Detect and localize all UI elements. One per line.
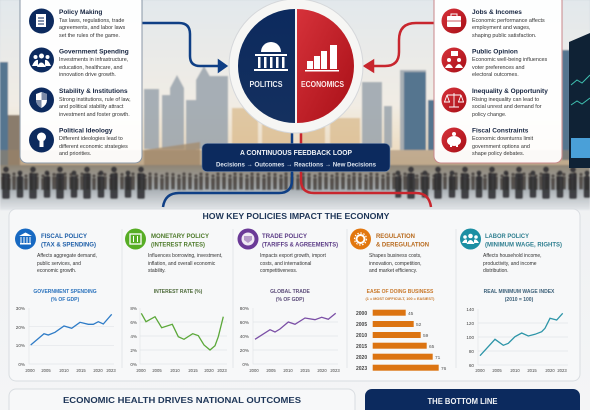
chart: interest rate: 2010 <box>170 368 180 373</box>
chart: ease of doing business: 71 <box>435 355 441 361</box>
item: government spending: innovation drive growth. <box>59 72 116 78</box>
item: fiscal constraints: Fiscal Constraints <box>472 128 529 134</box>
chart: government spending <box>16 289 116 373</box>
chart: real minimum wage index: 2010 <box>510 368 520 373</box>
item: government spending: Government Spending <box>59 48 129 56</box>
item: fiscal constraints: shape policy debates. <box>472 151 524 157</box>
item: policy making: Policy Making <box>59 9 102 16</box>
chart: real minimum wage index: 2023 <box>557 368 567 373</box>
item: jobs and incomes: Jobs & Incomes <box>472 9 522 16</box>
item: jobs and incomes <box>442 8 545 39</box>
item: stability and institutions: and political stability attract <box>59 104 124 110</box>
column: regulation and deregulation <box>350 228 447 372</box>
chart: ease of doing business: 76 <box>441 366 447 372</box>
item: stability and institutions: Stability & Institutions <box>59 88 128 95</box>
column: monetary policy: MONETARY POLICY <box>151 233 209 240</box>
chart: real minimum wage index: 120 <box>466 321 474 326</box>
chart: government spending: 10% <box>16 343 25 348</box>
item: political ideology: Political Ideology <box>59 128 113 134</box>
chart: ease of doing business: 2005 <box>356 322 367 328</box>
panel: economic health drives national outcomes <box>9 389 355 410</box>
chart: government spending: GOVERNMENT SPENDING <box>33 289 97 295</box>
chart: interest rate: 2023 <box>217 368 227 373</box>
chart: global trade: 80% <box>240 306 249 311</box>
label: economics: ECONOMICS <box>301 80 345 89</box>
chart: government spending: 0% <box>18 362 25 367</box>
chart: government spending: 2020 <box>93 368 103 373</box>
chart: ease of doing business: 2000 <box>356 311 367 317</box>
column: labor policy: distribution. <box>483 268 509 274</box>
large display screen <box>569 33 590 168</box>
callout: continuous feedback loop: Decisions → Outcomes → Reactions → New Decisions <box>216 162 376 168</box>
chart: real minimum wage index: 140 <box>466 307 474 312</box>
item: government spending: education, healthcare, and <box>59 65 123 71</box>
chart: interest rate: 2020 <box>204 368 214 373</box>
icon: fiscal policy <box>15 228 36 250</box>
chart: ease of doing business: (1 = MOST DIFFICULT, 100 = EASIEST) <box>366 297 435 301</box>
panel: politics drivers <box>20 0 142 163</box>
item: stability and institutions <box>29 88 131 118</box>
column: labor policy: productivity, and income <box>483 261 537 267</box>
icon: monetary policy <box>125 228 146 250</box>
chart: real minimum wage index: 2005 <box>492 368 502 373</box>
item: public opinion: voter preferences and <box>472 65 524 71</box>
chart: ease of doing business: 2010 <box>356 333 367 339</box>
column: labor policy: LABOR POLICY <box>485 233 529 240</box>
icon: capitol building <box>254 42 288 71</box>
chart: ease of doing business: 2015 <box>356 344 367 350</box>
chart: global trade: 20% <box>240 348 249 353</box>
panel: the bottom line <box>365 389 580 410</box>
item: jobs and incomes: Economic performance affects <box>472 18 545 24</box>
column: fiscal policy: economic growth. <box>37 268 76 274</box>
item: stability and institutions: Strong institutions, rule of law, <box>59 97 131 103</box>
chart: global trade: 2005 <box>266 368 276 373</box>
chart: government spending: 2015 <box>76 368 86 373</box>
column: trade policy: (TARIFFS & AGREEMENTS) <box>262 242 338 248</box>
chart: global trade: 2023 <box>330 368 340 373</box>
column: regulation and deregulation: Shapes business costs, <box>369 253 422 259</box>
callout: continuous feedback loop <box>202 144 390 172</box>
chart: interest rate <box>130 289 227 373</box>
chart: government spending: 2000 <box>25 368 35 373</box>
item: inequality and opportunity: social unrest and demand for <box>472 104 542 110</box>
chart: government spending: 2010 <box>59 368 69 373</box>
item: political ideology: different economic strategies <box>59 144 128 150</box>
column: trade policy <box>238 228 340 373</box>
item: public opinion: electoral outcomes. <box>472 72 519 78</box>
column: fiscal policy: (TAX & SPENDING) <box>41 242 96 248</box>
chart: real minimum wage index: 2020 <box>545 368 555 373</box>
heading: policies: HOW KEY POLICIES IMPACT THE ECONOMY <box>202 211 390 221</box>
panel: economic effects <box>434 0 562 163</box>
chart: global trade: 2015 <box>300 368 310 373</box>
chart: real minimum wage index: 100 <box>466 335 474 340</box>
callout: continuous feedback loop: A CONTINUOUS FEEDBACK LOOP <box>240 148 352 157</box>
chart: ease of doing business: 59 <box>423 333 429 339</box>
arrow: feedback lines to policy panel <box>163 132 431 207</box>
item: political ideology: Different ideologies lead to <box>59 136 123 142</box>
item: public opinion <box>442 48 548 78</box>
chart: government spending: 2005 <box>41 368 51 373</box>
column: trade policy: competitiveness. <box>260 268 297 274</box>
item: policy making: Tax laws, regulations, trade <box>59 18 124 24</box>
chart: ease of doing business: 2023 <box>356 366 367 372</box>
column: fiscal policy <box>15 228 116 373</box>
chart: global trade <box>240 289 340 373</box>
column: monetary policy: inflation, and overall economic <box>148 261 216 267</box>
column: regulation and deregulation: REGULATION <box>376 233 415 240</box>
chart: interest rate: 2000 <box>136 368 146 373</box>
item: inequality and opportunity <box>442 88 548 118</box>
item: government spending: Investments in infrastructure, <box>59 57 129 63</box>
item: fiscal constraints <box>442 128 534 157</box>
item: jobs and incomes: employment and wages, <box>472 25 531 31</box>
central circle: politics and economics <box>229 0 363 133</box>
chart: interest rate: INTEREST RATE (%) <box>154 289 203 295</box>
item: inequality and opportunity: Rising inequality can lead to <box>472 97 539 103</box>
chart: ease of doing business: 45 <box>408 311 414 317</box>
item: political ideology <box>29 128 128 157</box>
icon: trade policy <box>238 228 258 250</box>
chart: global trade: (% OF GDP) <box>276 297 304 303</box>
chart: interest rate: 2% <box>130 348 137 353</box>
chart: global trade: 60% <box>240 320 249 325</box>
chart: interest rate: 8% <box>130 306 137 311</box>
chart: government spending: 30% <box>16 306 25 311</box>
chart: real minimum wage index: (2010 = 100) <box>505 297 534 303</box>
icon: regulation gear <box>350 228 371 250</box>
chart: real minimum wage index: 80 <box>469 349 474 354</box>
item: fiscal constraints: government options and <box>472 144 530 150</box>
column: monetary policy: stability. <box>148 268 166 274</box>
item: policy making: set the rules of the game. <box>59 33 120 39</box>
item: policy making: agreements, and labor laws <box>59 25 126 31</box>
chart: ease of doing business: EASE OF DOING BUSINESS <box>367 289 434 295</box>
chart: interest rate: 6% <box>130 320 137 325</box>
chart: real minimum wage index: REAL MINIMUM WAGE INDEX <box>484 289 555 295</box>
icon: bar chart <box>305 45 339 72</box>
chart: interest rate: 2005 <box>152 368 162 373</box>
column: trade policy: TRADE POLICY <box>262 233 307 240</box>
chart: real minimum wage index <box>466 289 568 373</box>
item: political ideology: and priorities. <box>59 151 91 157</box>
chart: global trade: 2020 <box>317 368 327 373</box>
chart: global trade: 2010 <box>283 368 293 373</box>
panel: the bottom line: THE BOTTOM LINE <box>428 396 498 406</box>
panel: how key policies impact the economy <box>9 209 580 381</box>
column: regulation and deregulation: and market efficiency. <box>369 268 417 274</box>
column: fiscal policy: FISCAL POLICY <box>41 233 87 240</box>
chart: ease of doing business: 65 <box>429 344 435 350</box>
chart: government spending: (% OF GDP) <box>51 297 79 303</box>
chart: global trade: 2000 <box>249 368 259 373</box>
panel: economic health drives national outcomes: ECONOMIC HEALTH DRIVES NATIONAL OUTCOMES <box>63 395 301 405</box>
column: monetary policy <box>125 228 227 373</box>
arrow: policy making to politics <box>142 23 226 71</box>
item: public opinion: Economic well-being influences <box>472 57 548 63</box>
column: monetary policy: (INTEREST RATES) <box>151 242 205 248</box>
chart: ease of doing business <box>356 289 447 372</box>
column: fiscal policy: public services, and <box>37 261 81 267</box>
chart: real minimum wage index: 60 <box>469 363 474 368</box>
chart: real minimum wage index: 2000 <box>475 368 485 373</box>
label: politics: POLITICS <box>250 80 283 89</box>
chart: real minimum wage index: 2015 <box>527 368 537 373</box>
item: inequality and opportunity: policy change. <box>472 112 506 118</box>
chart: global trade: 40% <box>240 334 249 339</box>
item: policy making <box>29 8 126 39</box>
chart: ease of doing business: 52 <box>416 322 422 328</box>
item: public opinion: Public Opinion <box>472 48 518 56</box>
item: jobs and incomes: shaping public satisfaction. <box>472 33 536 39</box>
chart: government spending: 20% <box>16 325 25 330</box>
column: trade policy: Impacts export growth, import <box>260 253 326 259</box>
chart: global trade: 0% <box>242 362 249 367</box>
column: labor policy: Affects household income, <box>483 253 542 259</box>
chart: interest rate: 4% <box>130 334 137 339</box>
column: labor policy: (MINIMUM WAGE, RIGHTS) <box>485 242 562 248</box>
chart: ease of doing business: 2020 <box>356 355 367 361</box>
item: inequality and opportunity: Inequality & Opportunity <box>472 88 548 95</box>
item: government spending <box>29 48 129 78</box>
item: stability and institutions: investment and foster growth. <box>59 112 130 118</box>
column: regulation and deregulation: innovation, competition, <box>369 261 422 267</box>
chart: government spending: 2023 <box>106 368 116 373</box>
arrow: economics to jobs and incomes <box>365 23 434 71</box>
column: monetary policy: Influences borrowing, investment, <box>148 253 222 259</box>
chart: interest rate: 0% <box>130 362 137 367</box>
icon: labor policy <box>460 228 481 250</box>
chart: global trade: GLOBAL TRADE <box>270 289 310 295</box>
column: labor policy <box>460 228 568 373</box>
column: trade policy: costs, and international <box>260 261 311 267</box>
column: regulation and deregulation: & DEREGULATION <box>376 242 429 248</box>
chart: interest rate: 2015 <box>188 368 198 373</box>
column: fiscal policy: Affects aggregate demand, <box>37 253 97 259</box>
item: fiscal constraints: Economic downturns limit <box>472 136 534 142</box>
